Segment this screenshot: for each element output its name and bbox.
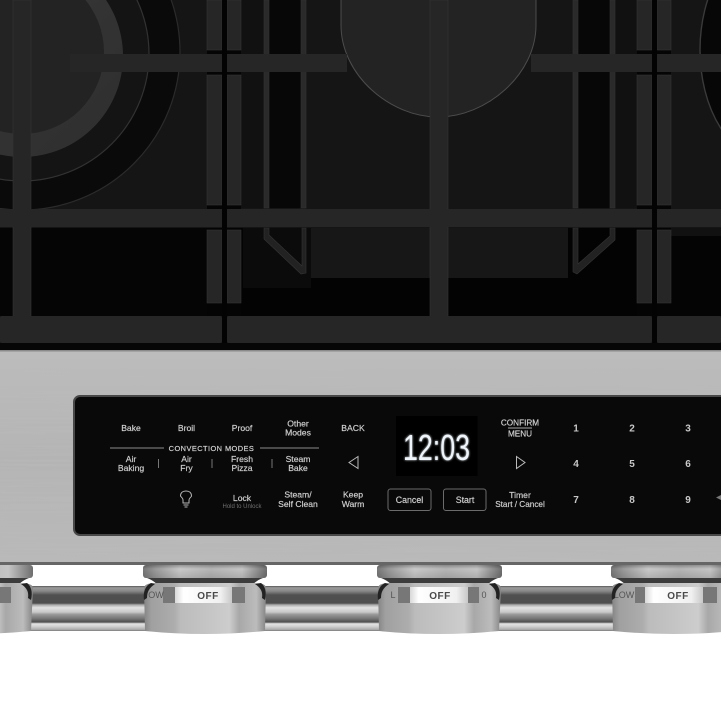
convection labels: Air (126, 454, 136, 464)
bottom row labels: Self Clean (278, 499, 318, 509)
timer label (495, 490, 545, 509)
knob: centre (377, 565, 502, 634)
number keypad: 6 (685, 459, 691, 470)
convection labels: Bake (288, 463, 308, 473)
bottom row labels: Keep (343, 490, 363, 500)
convection labels: Fry (180, 463, 193, 473)
start button: Start (456, 495, 475, 505)
grate gaps (222, 0, 657, 343)
confirm menu label: CONFIRM (501, 418, 539, 428)
mode labels: Proof (232, 423, 253, 433)
bottom row labels: Steam/ (284, 490, 312, 500)
clock display: 12:03 (403, 427, 470, 468)
grate (0, 0, 721, 343)
icon: back arrow (349, 456, 358, 468)
knob: far left (0, 565, 33, 634)
mode labels: Bake (121, 423, 141, 433)
knob: centre: OFF (429, 591, 451, 602)
knob: right: LOW (614, 590, 635, 600)
convection labels: Baking (118, 463, 144, 473)
convection labels: Fresh (231, 454, 253, 464)
knob rail (0, 586, 721, 631)
paired vertical bars (207, 0, 671, 303)
mode labels (121, 418, 365, 438)
bottom row labels (222, 490, 364, 510)
knob: left: OFF (197, 591, 219, 602)
knob: right (611, 565, 721, 634)
number keypad: 3 (685, 424, 691, 434)
main vertical bars (13, 0, 448, 320)
cooktop background (0, 0, 721, 351)
number keypad (573, 424, 721, 506)
grate support legs (264, 0, 615, 274)
mode labels: Modes (285, 428, 311, 438)
confirm menu label: MENU (508, 430, 532, 438)
stainless steel front (0, 350, 721, 565)
mode labels: BACK (341, 423, 365, 433)
mode labels: Broil (178, 423, 195, 433)
number keypad: 2 (629, 424, 635, 434)
number keypad: 5 (629, 459, 635, 470)
number keypad: 8 (629, 495, 635, 506)
icon: light bulb (180, 491, 192, 507)
mode labels: Other (287, 418, 309, 428)
knob: centre: L (390, 590, 396, 600)
burner: right (700, 0, 721, 160)
bottom row labels: Hold to Unlock (222, 504, 263, 510)
bottom row labels: Lock (233, 493, 252, 503)
bottom row labels: Warm (342, 499, 364, 509)
convection labels (118, 454, 310, 473)
convection labels: Steam (286, 454, 310, 464)
timer label: Start / Cancel (495, 500, 545, 509)
number keypad: 9 (685, 495, 691, 506)
knob: centre: 0 (481, 590, 487, 600)
cancel button: Cancel (396, 495, 423, 505)
horizontal bars (0, 54, 721, 343)
number keypad: 7 (573, 495, 579, 506)
clock display (396, 416, 478, 476)
timer label: Timer (509, 490, 531, 500)
convection modes heading: CONVECTION MODES (169, 444, 254, 453)
number keypad: 4 (573, 459, 579, 470)
icon: forward arrow (516, 456, 525, 468)
convection labels: Pizza (231, 463, 253, 473)
start button (444, 489, 486, 510)
convection labels: Air (181, 454, 192, 464)
centre burner cap (341, 0, 536, 117)
number keypad: 1 (573, 424, 579, 434)
knob: right: OFF (667, 591, 689, 602)
confirm menu label (501, 418, 539, 438)
cancel button (388, 489, 431, 510)
control panel (74, 396, 721, 535)
knob: left (143, 565, 267, 634)
knob: left: OW (148, 590, 164, 600)
burner: left (0, 0, 180, 210)
